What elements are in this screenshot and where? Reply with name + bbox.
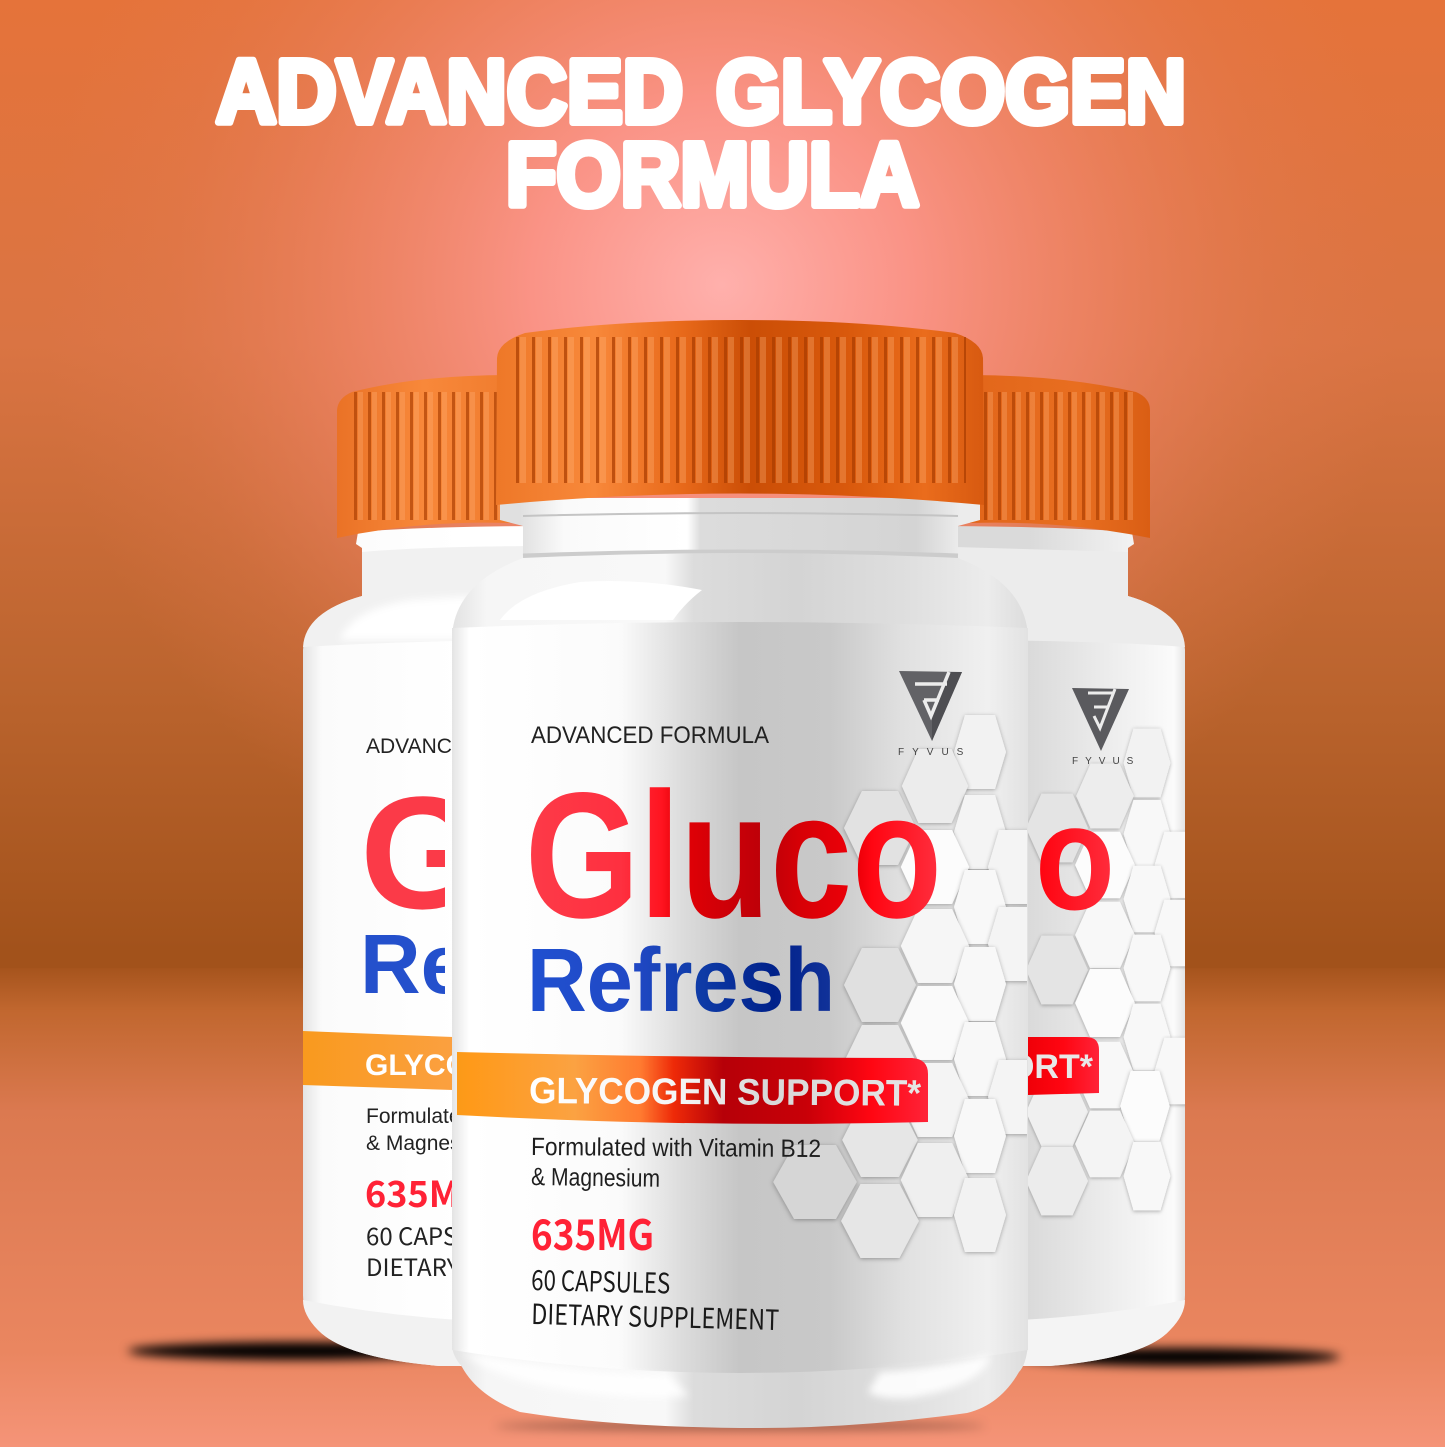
left bottle label text: G (360, 763, 484, 942)
right bottle logo (1072, 688, 1140, 767)
left bottle label text: Ref (360, 917, 496, 1011)
left bottle label text (303, 597, 452, 1360)
product name: Refresh (527, 931, 835, 1031)
right back bottle (920, 375, 1201, 1366)
logo: FYVUS (898, 747, 971, 758)
front bottle cap (496, 320, 984, 505)
left bottle label text: 60 CAPSULES (366, 1217, 516, 1252)
right bottle hexagons (1026, 729, 1201, 1215)
label: advanced formula: ADVANCED FORMULA (531, 722, 769, 749)
glycogen support band (457, 1052, 928, 1124)
product name (525, 755, 942, 1031)
right bottle shoulder shading (920, 546, 1185, 647)
left bottle label text: 635MG (365, 1166, 485, 1218)
front bottle body (452, 553, 1028, 1428)
left bottle label text: GLYCO (365, 1049, 469, 1082)
capsule count and type: 60 CAPSULES (531, 1259, 671, 1302)
title (216, 42, 1186, 226)
dosage: 635MG (531, 1202, 654, 1263)
title: ADVANCED (216, 42, 683, 142)
hexagon pattern (773, 715, 1040, 1258)
left bottle shoulder highlight (340, 596, 470, 640)
formulation text (531, 1133, 821, 1193)
capsule count and type (531, 1259, 780, 1339)
left bottle label text: & Magnesium (366, 1132, 494, 1155)
left bottle cap (337, 375, 510, 538)
title: GLYCOGEN (716, 42, 1186, 142)
left bottle bottom rim (303, 1300, 460, 1366)
formulation text: & Magnesium (531, 1163, 660, 1193)
front bottle label area (452, 622, 1028, 1373)
neck lower shadow (523, 552, 958, 556)
front bottle (452, 320, 1040, 1428)
logo (898, 671, 971, 758)
right bottle label text (1028, 828, 1110, 1095)
right bottle body (920, 526, 1185, 1366)
right bottle label text: o (1035, 773, 1115, 941)
right bottle logo: FYVUS (1072, 756, 1140, 767)
neck ring shadow (523, 513, 958, 516)
title: FORMULA (506, 126, 919, 226)
product name: Gluco (525, 755, 942, 955)
right bottle seam line (1026, 692, 1028, 1140)
glycogen support band: GLYCOGEN SUPPORT* (529, 1070, 922, 1114)
left bottle label text: ADVANCE (366, 735, 466, 758)
left back bottle (303, 375, 619, 1366)
right bottle cap (970, 375, 1150, 538)
right bottle bottom rim (1020, 1300, 1185, 1366)
left bottle shoulder shading (303, 546, 560, 647)
left bottle label text: Formulated (366, 1105, 472, 1128)
left bottle body (303, 526, 560, 1366)
left bottle label text: DIETARY SUPPLEMENT (366, 1248, 619, 1283)
capsule count and type: DIETARY SUPPLEMENT (531, 1293, 780, 1339)
front bottle neck (500, 498, 980, 575)
bottom rim highlights (462, 1352, 990, 1398)
right bottle label text: PORT* (985, 1048, 1094, 1086)
formulation text: Formulated with Vitamin B12 (531, 1133, 821, 1163)
shoulder highlight (500, 581, 702, 620)
floor shadows (128, 1342, 1340, 1430)
